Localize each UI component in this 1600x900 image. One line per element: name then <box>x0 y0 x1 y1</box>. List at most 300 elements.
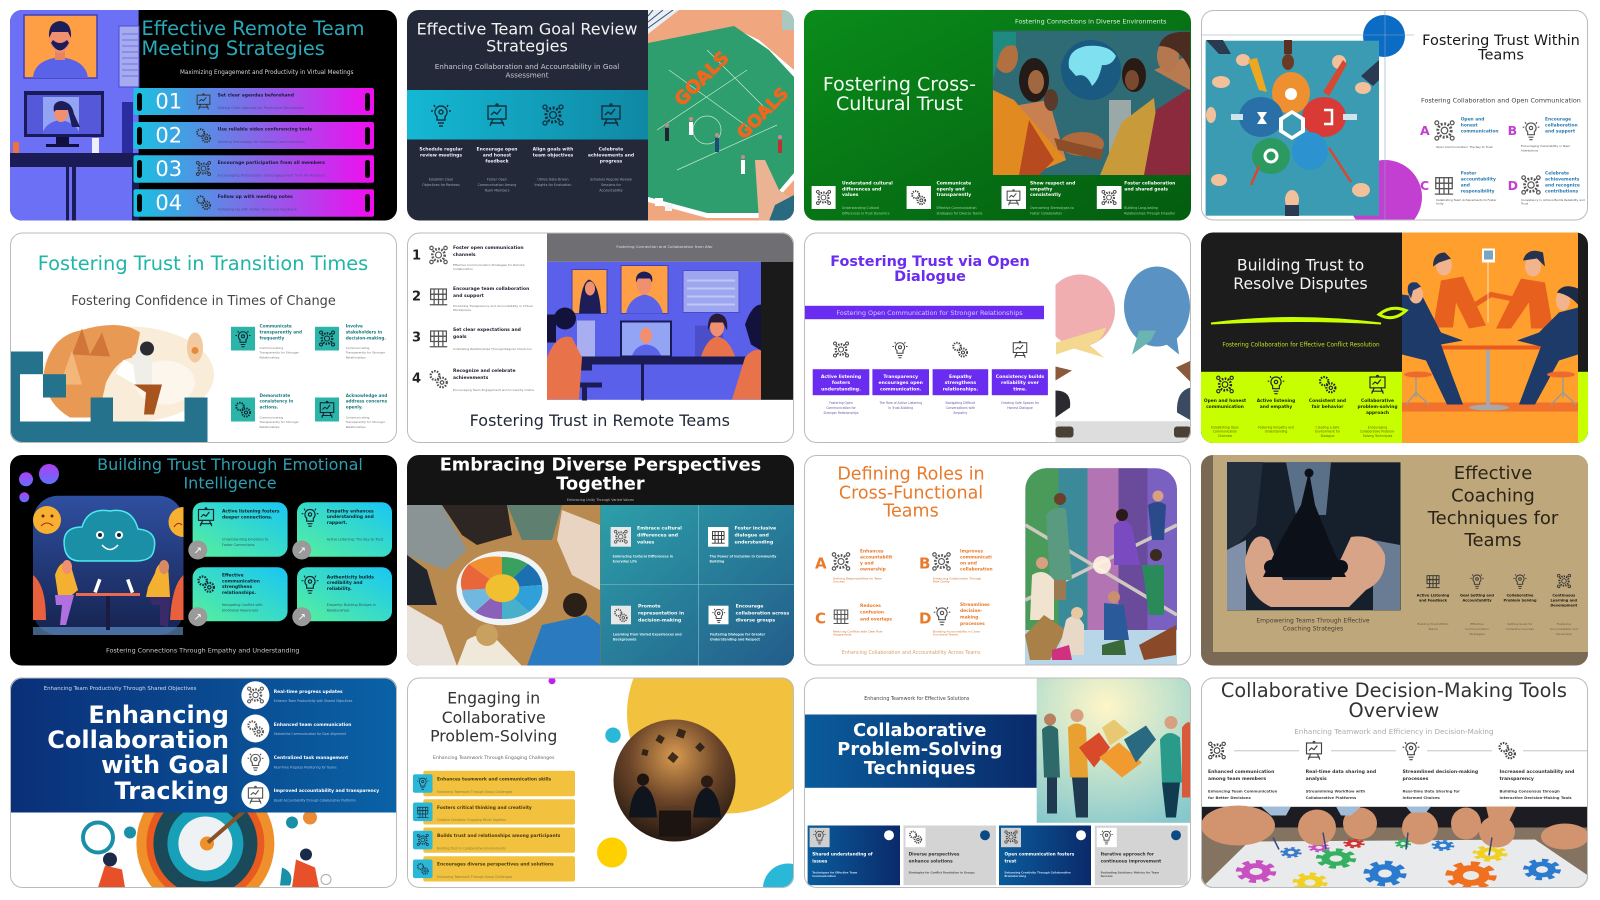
column: consistency: Creating Safe Spaces for <box>1001 401 1039 405</box>
column: goal setting: Communication <box>1465 627 1489 631</box>
illustration: business people around a table <box>1379 232 1578 444</box>
item A: Open Communication: The Key to Trust <box>1436 145 1493 149</box>
item: representation <box>611 604 684 642</box>
column: fair behavior: Environment for <box>1315 430 1341 434</box>
header band <box>547 232 794 262</box>
item B: Enhancing Collaboration Through <box>933 576 981 580</box>
item: cultural differences <box>611 525 682 564</box>
item: communicate openly: openly and <box>936 186 965 192</box>
list item 1: 1 <box>412 248 421 264</box>
illustration: goals on a football pitch: GOALS <box>733 84 793 144</box>
title band: Problem-Solving <box>837 739 1002 760</box>
illustration: goals on a football pitch <box>648 10 794 221</box>
card: Collaborative Problem-Solving Techniques <box>804 678 1191 888</box>
column: learning: Continuous <box>1552 594 1575 598</box>
item A: accountabilit <box>860 555 892 561</box>
title band: Collaborative <box>853 720 987 741</box>
blue header band <box>10 678 397 812</box>
item: acknowledge concerns: Relationships <box>346 425 366 429</box>
item A: communication <box>1461 128 1499 134</box>
list item 02 <box>134 122 374 149</box>
item B: collaboration <box>960 567 993 573</box>
column descriptions <box>422 177 632 193</box>
column labels: achievements and <box>588 153 634 159</box>
item: representation: Learning from Varied Experiences and <box>613 633 682 637</box>
column: active listening: understanding. <box>821 386 861 392</box>
item D: contributions <box>1545 188 1579 194</box>
item: cultural differences: differences and <box>637 532 678 538</box>
item: task management: Centralized task management <box>274 755 348 761</box>
item: acknowledge concerns <box>315 393 388 429</box>
subtitle band: Fostering Open Communication for Stronger Relationships <box>836 309 1023 317</box>
column: active listening <box>813 369 869 415</box>
title: Together <box>556 474 645 494</box>
item: respect and empathy: empathy <box>1030 186 1052 192</box>
subtitle band <box>804 306 1056 319</box>
list item 2: and support <box>453 293 485 299</box>
column: consistency: Honest Dialogue <box>1007 406 1033 410</box>
item: cultural differences: Understand cultural <box>842 182 893 187</box>
card: effective communication: Effective <box>222 574 244 579</box>
subtitle: Maximizing Engagement and Productivity in Virtual Meetings <box>180 70 353 76</box>
tile: open communication: trust <box>1004 858 1016 864</box>
item A <box>815 548 892 584</box>
card: authenticity: ↗ <box>298 612 306 623</box>
item C: confusion <box>860 609 884 615</box>
subtitle: Empowering Teams Through Effective <box>1256 617 1370 624</box>
item: acknowledge concerns: Acknowledge and <box>346 393 387 398</box>
column: empathy: Empathy <box>949 375 972 380</box>
list item: critical thinking: Fosters critical thinking and creativity <box>437 805 532 811</box>
item D: Consistency in Actions Builds Reliability and <box>1521 198 1585 202</box>
column: active listening <box>1257 376 1295 434</box>
list item 02: Utilizing Technology for Seamless Communication <box>218 140 305 144</box>
card: Enhancing Collaboration with Goal Tracking <box>10 678 397 900</box>
column: fair behavior: fair behavior <box>1312 404 1344 410</box>
item A: Open and <box>1461 118 1484 123</box>
item: communicate transparently: Transparently for Stronger <box>258 350 300 354</box>
list item 2: 2 <box>412 290 421 304</box>
column: accountability: Increased accountability and <box>1500 770 1574 775</box>
list item: diverse perspectives <box>413 856 575 882</box>
column: problem-solving: Collaborative <box>1361 399 1394 404</box>
item: representation: Backgrounds <box>613 638 636 642</box>
title: Engaging in <box>447 688 540 708</box>
item C: C <box>815 610 826 628</box>
card: Fostering Cross-Cultural Trust <box>804 10 1191 221</box>
item: communicate openly: transparently <box>936 192 971 198</box>
list item 3: Set clear expectations and <box>453 328 521 333</box>
column descriptions: Team Members <box>483 189 510 193</box>
title: Building Trust to <box>1237 256 1364 274</box>
column: fair behavior: Consistent and <box>1309 399 1346 404</box>
list item 2 <box>412 286 533 312</box>
column: problem solving: Problem Solving <box>1503 599 1537 603</box>
illustration: people seated around a wheel <box>407 505 600 666</box>
column: fair behavior: Creating a Safe <box>1316 426 1339 430</box>
purple bubbles <box>19 464 59 502</box>
column: problem-solving: problem-solving <box>1357 404 1398 410</box>
card: authenticity: Empathy: Building Bridges in <box>327 603 376 607</box>
title: Effective <box>1454 463 1532 484</box>
tile: iterative approach: Iterative approach for <box>1101 852 1154 858</box>
item B <box>1508 117 1578 152</box>
card: empathy: Active Listening: The Key to Trust <box>327 538 384 542</box>
tile: open communication: Brainstorming <box>1004 874 1026 878</box>
column: fair behavior: Dialogue <box>1321 434 1334 438</box>
item: inclusive dialogue: understanding <box>734 539 773 545</box>
column labels: team objectives <box>533 153 574 159</box>
illustration: video team meeting <box>547 262 794 400</box>
item: cultural differences <box>812 181 893 215</box>
list item: trust: Building Trust in Collaborative Environments <box>437 846 506 850</box>
item: involve stakeholders: stakeholders in <box>346 330 382 334</box>
tile: iterative approach: Evaluating Solutions: Metrics for Team <box>1101 870 1159 874</box>
item: team communication: Streamline Communication for Goal Alignment <box>274 732 347 736</box>
item: task management <box>241 748 348 776</box>
column labels: and honest <box>483 153 512 159</box>
column descriptions: Utilize Data-Driven <box>537 177 569 181</box>
item: communicate transparently: Relationships <box>260 356 280 360</box>
column: empathy: strengthens <box>945 380 976 386</box>
item C <box>1420 171 1497 206</box>
item: respect and empathy: Overcoming Stereotypes to <box>1030 206 1074 210</box>
item: communicate openly: Effective Communication <box>936 206 977 210</box>
card: active listening: Active listening fosters <box>222 509 280 514</box>
card: active listening: deeper connections. <box>222 515 273 521</box>
illustration: team assembling puzzle pieces <box>1037 678 1191 823</box>
item C: and <box>1461 182 1470 188</box>
card: Fostering Trust in Remote Teams <box>407 232 794 444</box>
item A: Enhances <box>860 549 884 554</box>
column: problem-solving: Encouraging <box>1368 426 1387 430</box>
column: active listening: Fostering Open <box>829 401 853 405</box>
card: effective communication: communication <box>222 579 260 585</box>
item: cultural differences: values <box>842 192 859 198</box>
item B <box>919 548 993 584</box>
list item 1: Foster open communication <box>453 246 524 251</box>
column: communication <box>1208 742 1278 800</box>
item C: and overlaps <box>860 617 892 623</box>
column: accountability: transparency <box>1500 776 1534 782</box>
column: problem solving: Collaborative <box>1507 594 1533 598</box>
title: Enhancing <box>88 701 229 729</box>
title: Defining Roles in <box>837 464 985 484</box>
title: Teams <box>1477 47 1524 63</box>
item: accountability <box>241 781 379 809</box>
item: involve stakeholders: Relationships <box>346 356 366 360</box>
card: active listening: Foster Connections <box>222 543 255 547</box>
column: active listening: Fostering Empathy and <box>1258 426 1294 430</box>
column labels: Schedule regular <box>419 148 463 153</box>
column: learning <box>1550 574 1578 636</box>
column: listening: Teams <box>1427 627 1438 631</box>
column: goal setting: Goal Setting and <box>1460 594 1494 598</box>
item D: and recognize <box>1545 182 1580 188</box>
card: effective communication: relationships. <box>222 590 256 596</box>
item: respect and empathy: consistently <box>1030 192 1061 198</box>
column: transparency: encourages open <box>878 380 923 386</box>
item: communicate transparently: transparently and <box>260 330 302 334</box>
list item 01: Set clear agendas beforehand <box>218 93 294 99</box>
list item 2: Workspaces <box>453 308 471 312</box>
item: demonstrate consistency: Demonstrate <box>260 393 290 398</box>
column: streamlined processes: Informed Choices <box>1402 795 1441 800</box>
item: communicate openly <box>907 181 983 215</box>
item: cultural differences: Everyday Life <box>613 560 637 564</box>
column: learning: Fostering <box>1557 622 1571 626</box>
card: Effective Coaching Techniques for Teams <box>1201 455 1588 666</box>
item C: accountability <box>1461 177 1496 183</box>
card: authenticity <box>292 567 392 626</box>
tile: iterative approach <box>1095 826 1188 885</box>
item: representation: decision-making <box>638 617 681 623</box>
title: Fostering Trust via Open <box>830 254 1030 270</box>
illustration: goals on a football pitch: GOALS <box>671 48 734 111</box>
item A: ownership <box>860 567 886 573</box>
list item 3: Cultivating Relationships Through Regular Check-Ins <box>453 347 532 351</box>
tile: shared understanding <box>808 826 900 885</box>
column descriptions: Accountability <box>599 189 623 193</box>
item B: B <box>919 554 930 572</box>
item D: processes <box>960 621 985 627</box>
item B: on and <box>960 561 977 567</box>
column: active listening: Stronger Relationships <box>824 411 859 415</box>
title: Fostering Trust in Transition Times <box>38 252 368 275</box>
item C: Assignments <box>833 632 852 636</box>
item D: Streamlines <box>960 603 990 608</box>
item A: Defining Responsibilities for Team <box>833 576 882 580</box>
illustration: remote video call <box>10 10 139 221</box>
column: empathy: Empathy <box>953 411 967 415</box>
list item: diverse perspectives: Enhancing Teamwork Through Group Challenges <box>437 875 513 879</box>
list item 2: Encourage team collaboration <box>453 287 529 292</box>
list item 01: 01 <box>155 90 182 114</box>
item: acknowledge concerns: Transparently for Stronger <box>345 420 386 424</box>
list item 04: Following Up with Action Items and Feedback <box>218 208 298 212</box>
title: Cross-Functional <box>839 484 983 504</box>
column: accountability: Interactive Decision-Making Tools <box>1500 795 1572 800</box>
item: communicate transparently <box>231 324 302 360</box>
item A: y and <box>860 561 874 567</box>
item: collaboration <box>708 604 789 642</box>
column: streamlined processes: Real-time Data Sharing for <box>1402 788 1460 794</box>
illustration: hands around a colourful flower <box>1206 40 1379 216</box>
tile: shared understanding: Communication <box>812 874 836 878</box>
item: accountability: Boost Accountability through Collaborative Platforms <box>274 798 356 802</box>
quadrant panel <box>600 505 794 666</box>
card: Defining Roles in Cross-Functional Teams <box>804 455 1191 666</box>
column: consistency: reliability over <box>1001 380 1040 386</box>
item: cultural differences: Embracing Cultural Differences in <box>613 555 673 559</box>
list item: trust: Builds trust and relationships among participants <box>437 833 561 839</box>
list item: diverse perspectives: Encourages diverse perspectives and solutions <box>437 862 554 868</box>
title: Techniques for <box>1427 508 1559 529</box>
item D: making <box>960 614 978 620</box>
item: shared goals: Building Long-lasting <box>1124 206 1158 210</box>
column: empathy: relationships. <box>943 386 978 392</box>
item D: D <box>1508 178 1518 193</box>
card: authenticity: credibility and <box>327 580 363 586</box>
item D: D <box>919 610 931 628</box>
tile: iterative approach: Success <box>1101 874 1113 878</box>
subtitle: Assessment <box>505 71 549 80</box>
item: demonstrate consistency <box>231 393 300 429</box>
column: accountability <box>1500 743 1574 800</box>
item C: Reducing Conflicts with Clear Role <box>833 629 882 633</box>
item B: B <box>1508 123 1517 138</box>
item: communicate transparently: frequently <box>260 336 284 340</box>
list item: critical thinking <box>413 799 575 824</box>
list item 1: Collaboration <box>453 267 473 271</box>
icon row <box>834 341 1027 358</box>
illustration: target with dart and people <box>83 774 331 900</box>
item D <box>919 602 990 636</box>
icon band <box>407 90 648 140</box>
column: honest communication: Establishing Open <box>1211 426 1239 430</box>
title band: Techniques <box>864 758 976 779</box>
title: Teams <box>1464 530 1521 551</box>
title: Collaborative <box>442 708 546 727</box>
item: communicate transparently: Communicating <box>260 346 283 350</box>
column: communication: Enhancing Team Communication <box>1208 788 1277 794</box>
list item 4: 4 <box>412 372 421 386</box>
item C: C <box>1420 178 1429 193</box>
tile: diverse perspectives: Strategies for Conflict Resolution in Groups <box>909 870 975 874</box>
column labels: progress <box>600 159 623 165</box>
card: authenticity: reliability. <box>327 586 352 592</box>
list item: trust <box>413 828 575 853</box>
item: accountability: Improved accountability and transparency <box>274 788 379 794</box>
card: Effective Remote Team Meeting Strategies <box>10 10 397 221</box>
illustration: hands holding a pyramid of figures <box>1227 462 1400 610</box>
list item 03: 03 <box>155 157 182 181</box>
timeline connectors <box>1234 750 1588 752</box>
item: demonstrate consistency: actions. <box>260 404 279 410</box>
item: involve stakeholders: decision-making. <box>346 336 386 340</box>
decorative circles <box>1201 10 1422 234</box>
title: Dialogue <box>894 269 966 285</box>
card: Collaborative Decision-Making Tools Overview <box>1201 678 1589 891</box>
item: team communication: Enhanced team communication <box>274 722 351 728</box>
tile: diverse perspectives: Diverse perspectives <box>909 852 959 858</box>
card: Embracing Diverse Perspectives Together <box>407 455 794 666</box>
column: problem-solving <box>1357 375 1398 438</box>
item B: Interactions <box>1521 148 1539 152</box>
footer caption: Fostering Connections Through Empathy and Understanding <box>106 646 299 654</box>
title: Overview <box>1349 699 1439 722</box>
column: active listening: and empathy <box>1260 404 1292 410</box>
column: goal setting: Accountability <box>1462 599 1492 603</box>
footer caption: Enhancing Collaboration and Accountability Across Teams <box>842 650 981 656</box>
card: effective communication: ↗ <box>194 612 202 623</box>
card: effective communication <box>188 567 288 626</box>
column: problem-solving: Collaborative Problem- <box>1360 430 1395 434</box>
item: acknowledge concerns: address concerns <box>346 398 388 404</box>
column: learning: Learning and <box>1550 599 1578 603</box>
column: honest communication <box>1204 376 1246 438</box>
card: empathy: rapport. <box>327 520 347 526</box>
column: problem solving: Setting Goals for <box>1507 622 1533 626</box>
subtitle: Enhancing Teamwork and Efficiency in Decision-Making <box>1294 727 1494 736</box>
column: data sharing: analysis <box>1306 776 1327 782</box>
item D <box>1508 171 1585 206</box>
lime brush stroke <box>1211 318 1381 324</box>
column: listening: Building Trust Within <box>1418 622 1448 626</box>
column: streamlined processes <box>1402 742 1478 800</box>
item: respect and empathy <box>1002 181 1075 215</box>
title: Problem-Solving <box>430 726 557 746</box>
column labels <box>419 147 634 165</box>
subtitle: Enhancing Collaboration and Accountability in Goal <box>435 62 619 71</box>
list item 03: Encourage participation from all members <box>218 160 325 166</box>
column: transparency: in Trust-Building <box>888 406 913 410</box>
list item 1: channels <box>453 252 476 258</box>
illustration: colleagues tied together by ropes <box>1025 468 1177 666</box>
illustration: two watercolor speech bubbles <box>1044 232 1191 444</box>
card: active listening <box>188 502 288 560</box>
card: Building Trust to Resolve Disputes <box>1201 232 1588 444</box>
item: inclusive dialogue: dialogue and <box>734 532 769 538</box>
title: Fostering Trust in Remote Teams <box>470 411 730 430</box>
item B: Encouraging Vulnerability in Team <box>1521 144 1570 148</box>
item B: Role Clarity <box>933 580 950 584</box>
item: demonstrate consistency: Transparently for Stronger <box>258 420 300 424</box>
column: listening: Active Listening <box>1417 594 1449 598</box>
subtitle: Fostering Collaboration and Open Communication <box>1421 96 1581 104</box>
item: collaboration: Encourage <box>736 605 763 610</box>
tile: shared understanding: Techniques for Effective Team <box>812 870 857 874</box>
item C: Unity <box>1436 202 1444 206</box>
column descriptions: Communication Among <box>478 183 516 187</box>
card: authenticity: Relationships <box>327 609 350 613</box>
card: effective communication: Navigating Conflict with <box>222 603 263 607</box>
column: communication: for Better Decisions <box>1208 795 1251 800</box>
title: Intelligence <box>183 474 277 493</box>
column: active listening: Active listening <box>821 375 861 380</box>
column: honest communication: communication <box>1206 404 1244 410</box>
title: Resolve Disputes <box>1233 274 1368 293</box>
column: consistency <box>992 369 1048 410</box>
item C: responsibility <box>1461 188 1495 194</box>
item D: Trust <box>1520 202 1529 206</box>
column descriptions: Sessions for <box>601 183 622 187</box>
list item 4: Encouraging Team Engagement and Inclusivity Online <box>453 388 534 392</box>
subtitle: Fostering Collaboration for Effective Conflict Resolution <box>1222 342 1380 348</box>
card: authenticity: Authenticity builds <box>327 575 374 580</box>
card: Effective Team Goal Review Strategies <box>407 10 794 221</box>
list item 1 <box>412 245 525 271</box>
title band <box>804 714 1037 788</box>
list item 01 <box>134 88 374 115</box>
item: progress updates <box>241 681 353 709</box>
tile: open communication <box>999 826 1091 885</box>
column: transparency: The Role of Active Listening <box>879 401 922 405</box>
item: communicate transparently: Communicate <box>260 324 292 328</box>
header band: Fostering Connection and Collaboration from Afar <box>616 244 713 249</box>
tile: open communication: Open communication fosters <box>1004 852 1074 858</box>
item: involve stakeholders: Involve <box>346 324 363 328</box>
item: communicate openly: Communicate <box>936 182 971 187</box>
title: Fostering Cross- <box>823 74 976 96</box>
title: Coaching <box>1451 486 1535 507</box>
column: listening: and Feedback <box>1419 599 1448 603</box>
title: Effective Remote Team <box>142 17 364 40</box>
column descriptions: Objectives for Reviews <box>422 183 460 187</box>
column descriptions: Foster Open <box>487 177 507 181</box>
illustration: cloud mascot and two people at a table <box>33 496 184 635</box>
item: inclusive dialogue: Building <box>710 560 725 564</box>
